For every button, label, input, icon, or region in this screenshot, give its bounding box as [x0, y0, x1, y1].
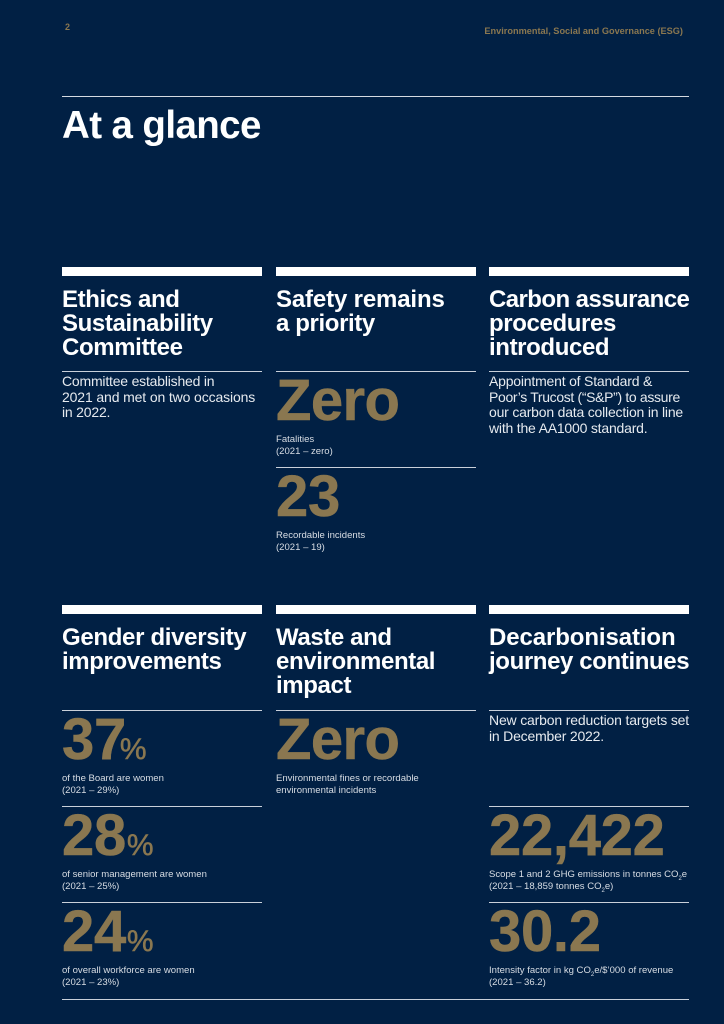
stat: zero fatalities: Zero	[276, 368, 399, 433]
heading: waste	[276, 624, 435, 699]
heading: safety: Safety remains	[276, 286, 445, 313]
note: fines: Environmental fines or recordable	[276, 773, 419, 784]
stat: 30.2: 30.2	[489, 899, 601, 964]
stat: 28%: 28%	[62, 803, 154, 868]
heading: ethics: Committee	[62, 334, 183, 361]
panel: waste and environmental impact	[276, 605, 476, 796]
stat: 37%: 37%	[62, 707, 147, 772]
body: targets: New carbon reduction targets set	[489, 712, 689, 728]
body: ethics: 2021 and met on two occasions	[62, 388, 255, 404]
note: scope 1 and 2: (2021 – 18,859 tonnes CO2e)	[489, 880, 613, 893]
panel: safety remains a priority	[276, 267, 476, 552]
note: scope 1 and 2: Scope 1 and 2 GHG emissions in tonnes CO2e	[489, 869, 687, 882]
note: incidents: (2021 – 19)	[276, 542, 325, 552]
heading: safety	[276, 286, 445, 337]
heading: gender diversity: Gender diversity	[62, 624, 246, 651]
heading: gender diversity	[62, 624, 246, 675]
heading: ethics	[62, 286, 213, 361]
stat: zero fines: Zero	[276, 707, 399, 772]
stat: 23 incidents: 23	[276, 464, 340, 529]
note: fatalities: (2021 – zero)	[276, 446, 333, 456]
note: intensity: (2021 – 36.2)	[489, 976, 546, 988]
heading: carbon assurance: procedures	[489, 310, 616, 337]
running header: Environmental, Social and Governance (ESG)	[484, 26, 683, 36]
note: intensity	[489, 965, 673, 988]
body: carbon assurance: our carbon data collection in line	[489, 404, 683, 420]
heading: decarbonisation: journey continues	[489, 648, 689, 675]
heading: carbon assurance	[489, 286, 690, 361]
body: ethics: in 2022.	[62, 404, 110, 420]
body: targets	[489, 712, 690, 744]
body: ethics	[62, 373, 255, 420]
panel: decarbonisation journey	[488, 605, 690, 988]
note: workforce	[62, 965, 195, 988]
note: workforce: (2021 – 23%)	[62, 976, 119, 988]
heading: carbon assurance: Carbon assurance	[489, 286, 689, 313]
page number: 2	[65, 22, 70, 32]
heading: waste: environmental	[276, 648, 435, 675]
stat: 22,422: 22,422	[489, 803, 665, 868]
bottom rule	[62, 999, 689, 1000]
body: carbon assurance: Poor’s Trucost (“S&P”) to assure	[489, 388, 680, 404]
note: fatalities	[276, 434, 333, 456]
note: incidents: Recordable incidents	[276, 530, 365, 541]
note: senior management: (2021 – 25%)	[62, 880, 119, 892]
heading: decarbonisation: Decarbonisation	[489, 624, 676, 651]
note: board: (2021 – 29%)	[62, 784, 119, 796]
note: scope 1 and 2	[489, 869, 687, 893]
note: senior management: of senior management are women	[62, 869, 207, 880]
note: board: of the Board are women	[62, 773, 164, 784]
heading: safety: a priority	[276, 310, 375, 337]
panel: carbon assurance	[489, 267, 690, 436]
panel: gender diversity	[62, 605, 262, 988]
title: At a glance	[62, 104, 261, 147]
note: board	[62, 773, 164, 796]
heading: ethics: Sustainability	[62, 310, 213, 337]
note: senior management	[62, 869, 207, 892]
title rule	[62, 96, 689, 97]
note: workforce: of overall workforce are women	[62, 965, 195, 976]
body: targets: in December 2022.	[489, 728, 604, 744]
heading: ethics: Ethics and	[62, 286, 180, 313]
heading: gender diversity: improvements	[62, 648, 222, 675]
note: fatalities: Fatalities	[276, 434, 314, 445]
heading: decarbonisation	[488, 624, 689, 675]
heading: waste: Waste and	[276, 624, 392, 651]
heading: waste: impact	[276, 672, 351, 699]
note: fines: environmental incidents	[276, 784, 376, 796]
body: carbon assurance: Appointment of Standard &	[489, 373, 652, 389]
note: fines	[276, 773, 419, 796]
note: incidents	[276, 530, 365, 552]
note: intensity: Intensity factor in kg CO2e/$’000 of revenue	[489, 965, 673, 978]
panel: ethics and sustainability committee	[62, 267, 262, 420]
body: carbon assurance: with the AA1000 standard.	[489, 420, 647, 436]
stat: 24%: 24%	[62, 899, 154, 964]
body: carbon assurance	[489, 373, 683, 436]
heading: carbon assurance: introduced	[489, 334, 609, 361]
body: ethics: Committee established in	[62, 373, 214, 389]
